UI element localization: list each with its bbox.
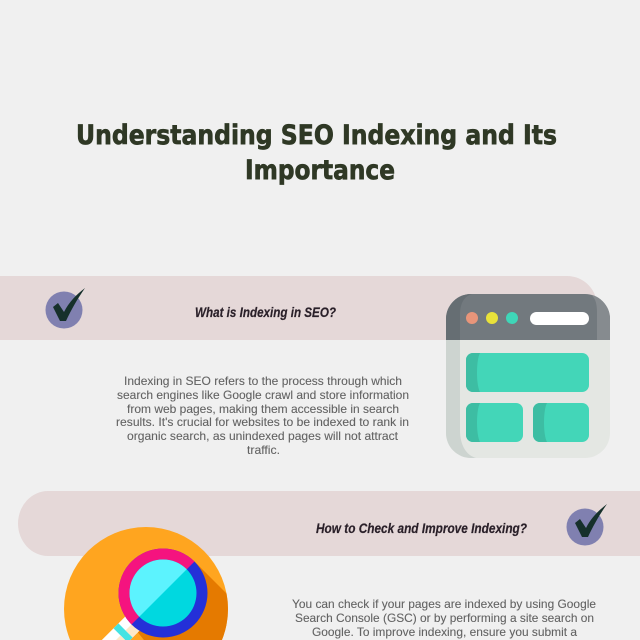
- icon: check badge 1: [46, 288, 85, 328]
- icon: browser window: [446, 294, 610, 458]
- panel: what is indexing: [0, 276, 610, 458]
- body text 1: organic search, as unindexed pages will not attract: [127, 429, 399, 443]
- body text 1: from web pages, making them accessible in search: [127, 402, 399, 416]
- title: Importance: [245, 155, 395, 186]
- title: [76, 120, 557, 186]
- body text 2: [292, 597, 598, 640]
- heading 2: How to Check and Improve Indexing?: [316, 520, 527, 536]
- heading band 2: [18, 491, 640, 556]
- heading band 1: [0, 276, 597, 340]
- body text 2: You can check if your pages are indexed by using Google: [292, 597, 596, 611]
- body text 2: Google. To improve indexing, ensure you submit a: [312, 625, 577, 639]
- icon: magnifying glass: [64, 527, 228, 640]
- body text 1: traffic.: [247, 443, 280, 457]
- body text 1: [116, 374, 409, 457]
- panel: how to check and improve: [18, 491, 640, 640]
- body text 1: results. It's crucial for websites to be indexed to rank in: [116, 415, 409, 429]
- body text 1: Indexing in SEO refers to the process through which: [124, 374, 402, 388]
- icon: check badge 2: [566, 504, 607, 546]
- title: Understanding SEO Indexing and Its: [76, 120, 557, 151]
- body text 2: Search Console (GSC) or by performing a site search on: [295, 611, 594, 625]
- heading 1: What is Indexing in SEO?: [195, 304, 336, 320]
- body text 1: search engines like Google crawl and store information: [117, 388, 409, 402]
